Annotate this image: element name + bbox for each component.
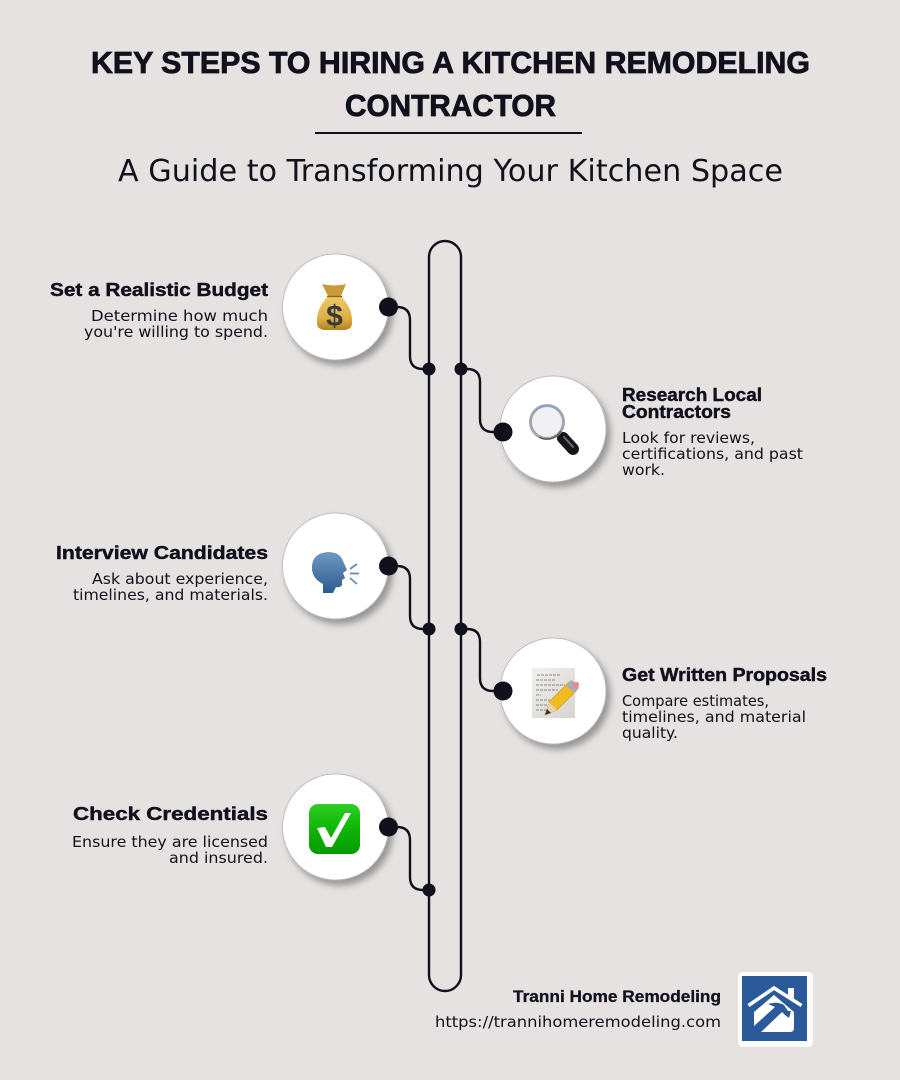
icon: memo and pencil [532, 668, 579, 718]
step 3 text [56, 542, 268, 604]
step 3 dot [379, 556, 398, 576]
step 4 text: Get Written Proposals [622, 664, 827, 685]
step 2 text: Contractors [622, 401, 731, 422]
step 1: set a realistic budget [50, 254, 436, 376]
icon: money bag: $ [326, 300, 343, 333]
icon: speaking head [312, 552, 359, 593]
step 3 text: Ask about experience, [92, 570, 268, 588]
title: KEY STEPS TO HIRING A KITCHEN REMODELING [91, 45, 810, 80]
step 1 text: Determine how much [91, 307, 268, 325]
subtitle: A Guide to Transforming Your Kitchen Space [118, 154, 783, 189]
step 4 junction [454, 622, 468, 636]
title [91, 45, 810, 123]
timeline capsule [429, 241, 461, 991]
step 5: check credentials [72, 774, 436, 896]
step 4 connector [461, 629, 503, 691]
step 5 dot [379, 818, 398, 836]
footer company text [435, 987, 721, 1031]
step 1 text: you're willing to spend. [84, 323, 268, 341]
step 3 text: Interview Candidates [56, 542, 268, 563]
step 4 text: Compare estimates, [622, 692, 769, 710]
step 5 junction [422, 884, 436, 896]
step 1 text: Set a Realistic Budget [50, 279, 268, 300]
step 4: get written proposals [454, 622, 827, 744]
step 1 dot [379, 298, 398, 316]
step 4 text: timelines, and material [622, 708, 806, 726]
step 3: interview candidates [56, 513, 436, 636]
step 4 dot [494, 682, 512, 700]
title: CONTRACTOR [345, 88, 556, 123]
step 1 junction [422, 362, 436, 376]
step 2 text: work. [622, 461, 665, 479]
title underline [315, 132, 582, 134]
step 2 text [622, 384, 803, 479]
step 1 text [50, 279, 268, 341]
step 5 text [72, 803, 268, 867]
step 2 text: Look for reviews, [622, 429, 755, 447]
logo: house and hammer [738, 972, 813, 1047]
step 5 text: Ensure they are licensed [72, 833, 268, 851]
step 2: research local contractors [454, 362, 803, 482]
step 3 junction [422, 622, 436, 636]
step 4 text [622, 664, 827, 742]
step 5 text: and insured. [169, 849, 268, 867]
step 5 circle [282, 774, 388, 880]
step 3 text: timelines, and materials. [73, 586, 268, 604]
step 4 text: quality. [622, 724, 678, 742]
step 5 text: Check Credentials [73, 803, 268, 824]
step 3 circle [282, 513, 388, 619]
footer company text: https://trannihomeremodeling.com [435, 1013, 721, 1031]
icon: magnifying glass [530, 406, 573, 449]
step 1 connector [389, 307, 429, 369]
step 2 circle [500, 376, 606, 482]
step 1 circle [282, 254, 388, 360]
step 2 dot [494, 422, 512, 442]
step 2 junction [454, 362, 468, 376]
icon: check mark [309, 804, 360, 854]
step 4 circle [500, 638, 606, 744]
step 3 connector [389, 566, 429, 629]
footer company text: Tranni Home Remodeling [513, 987, 721, 1006]
step 2 text: certifications, and past [622, 445, 803, 463]
icon: money bag [317, 284, 352, 333]
step 5 connector [389, 827, 429, 890]
step 2 connector [461, 369, 503, 432]
step 2 text: Research Local [622, 384, 762, 405]
